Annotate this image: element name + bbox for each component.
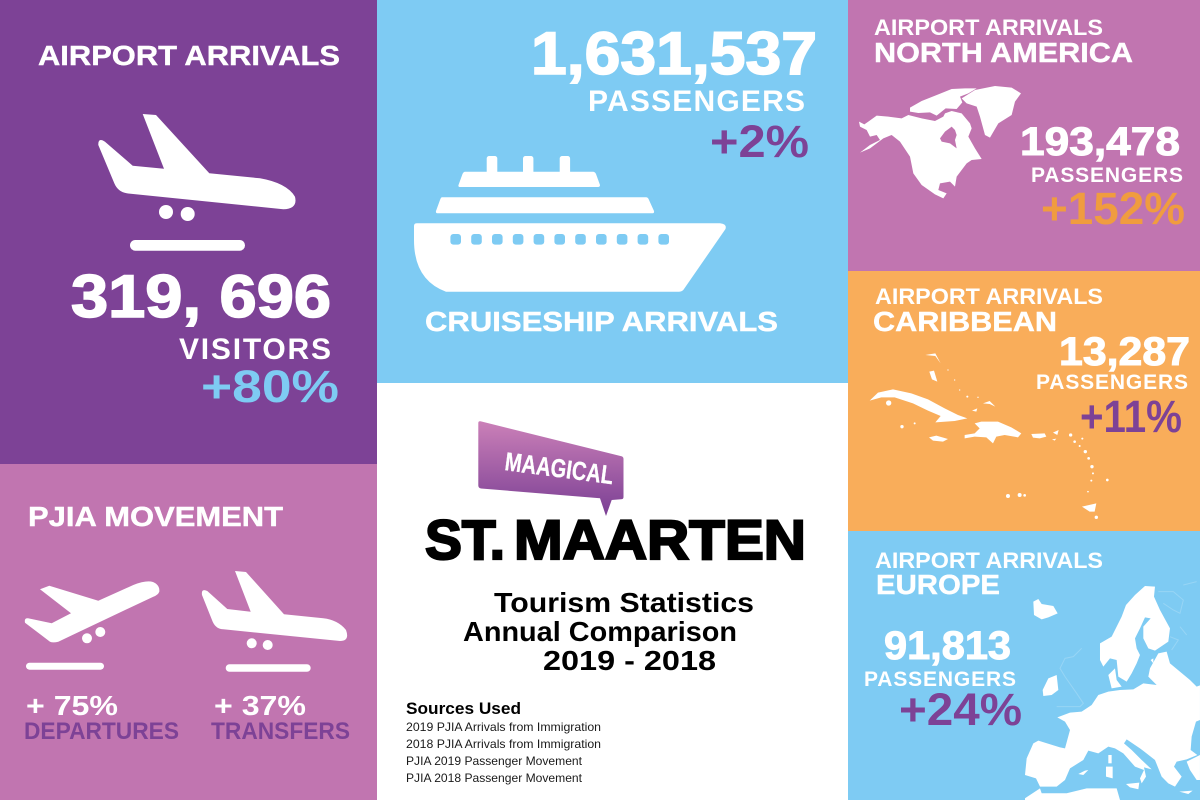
stat: Europe change: +24%	[899, 684, 1022, 735]
map: Caribbean	[870, 353, 1109, 519]
label: passengers: PASSENGERS	[1031, 164, 1183, 187]
text block: sources: PJIA 2019 Passenger Movement	[406, 754, 583, 768]
icon: arriving plane	[202, 571, 347, 672]
heading: cruiseship arrivals: CRUISESHIP ARRIVALS	[425, 306, 778, 337]
text block: sources: 2018 PJIA Arrivals from Immigration	[406, 737, 601, 751]
stat: Europe passengers: 91,813	[884, 624, 1011, 668]
title: tourism statistics: 2019 - 2018	[543, 645, 716, 676]
stat: cruise passengers count: 1,631,537	[531, 20, 817, 87]
logo: Maagical St. Maarten	[425, 421, 806, 571]
panel: logo and title	[377, 383, 848, 800]
text block: sources: 2019 PJIA Arrivals from Immigration	[406, 720, 601, 734]
logo: Maagical St. Maarten: MAAGICAL	[503, 446, 615, 490]
title: tourism statistics	[463, 587, 754, 676]
stat: cruise change: +2%	[710, 116, 809, 167]
text block: sources: Sources Used	[406, 699, 521, 718]
label: departures: DEPARTURES	[24, 718, 179, 745]
map: Europe	[1025, 582, 1200, 800]
icon: cruise ship	[414, 156, 726, 292]
panel: airport arrivals	[0, 0, 377, 464]
stat: visitors count: 319, 696	[71, 263, 331, 330]
icon: departing plane	[25, 581, 159, 670]
stat: departures change: + 75%	[26, 690, 118, 721]
text block: sources: PJIA 2018 Passenger Movement	[406, 771, 583, 785]
label: passengers: PASSENGERS	[864, 668, 1016, 691]
stat: transfers change: + 37%	[214, 690, 306, 721]
stat: Caribbean change: +11%	[1080, 391, 1182, 442]
label: visitors: VISITORS	[179, 333, 331, 366]
panel: cruiseship arrivals	[377, 0, 848, 383]
label: transfers: TRANSFERS	[211, 718, 350, 745]
stat: visitors change: +80%	[201, 361, 339, 412]
heading: airport arrivals: AIRPORT ARRIVALS	[38, 40, 340, 71]
logo: Maagical St. Maarten: MAARTEN	[514, 508, 806, 571]
stat: North America passengers: 193,478	[1020, 120, 1180, 164]
panel: North America	[848, 0, 1200, 271]
panel: Caribbean	[848, 271, 1200, 531]
label: passengers: PASSENGERS	[588, 85, 805, 118]
heading: airport arrivals North America	[874, 15, 1133, 68]
stat: Caribbean passengers: 13,287	[1059, 330, 1190, 374]
heading: airport arrivals Caribbean	[873, 284, 1103, 337]
heading: airport arrivals North America: AIRPORT ARRIVALS	[874, 15, 1103, 40]
panel: PJIA movement	[0, 464, 377, 800]
text block: sources	[406, 699, 601, 785]
logo: Maagical St. Maarten: ST.	[425, 508, 505, 571]
stat: North America change: +152%	[1041, 183, 1185, 234]
heading: airport arrivals Europe: EUROPE	[876, 569, 1000, 600]
panel: Europe	[848, 531, 1200, 800]
heading: airport arrivals Europe: AIRPORT ARRIVALS	[875, 548, 1103, 573]
heading: airport arrivals Caribbean: AIRPORT ARRIVALS	[875, 284, 1103, 309]
heading: airport arrivals Europe	[875, 548, 1103, 600]
heading: airport arrivals Caribbean: CARIBBEAN	[873, 306, 1057, 337]
heading: airport arrivals North America: NORTH AMERICA	[874, 37, 1133, 68]
label: passengers: PASSENGERS	[1036, 371, 1188, 394]
title: tourism statistics: Annual Comparison	[463, 616, 737, 647]
title: tourism statistics: Tourism Statistics	[494, 587, 754, 618]
heading: PJIA movement: PJIA MOVEMENT	[28, 501, 283, 532]
icon: landing plane	[98, 114, 296, 251]
map: North America	[859, 86, 1021, 198]
